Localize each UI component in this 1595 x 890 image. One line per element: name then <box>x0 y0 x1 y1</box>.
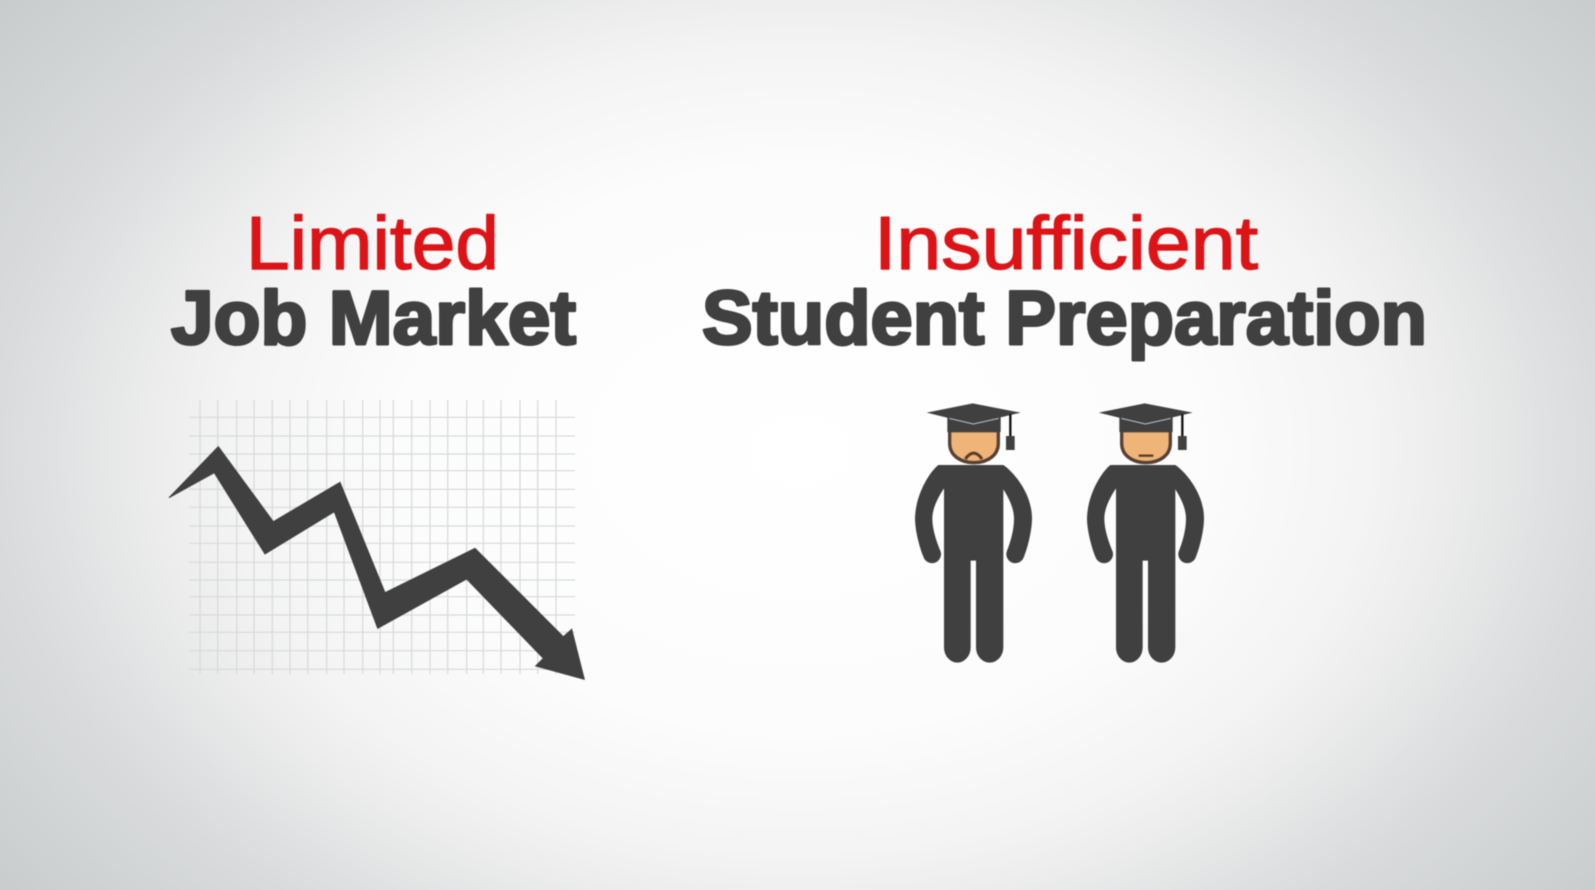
panel: insufficient student preparation <box>702 201 1427 663</box>
heading: Limited Job Market: Limited <box>246 201 499 285</box>
arms <box>1087 465 1204 563</box>
tassel <box>1179 414 1186 437</box>
body and legs <box>944 465 1003 663</box>
icon: neutral graduate <box>1087 403 1204 663</box>
cap <box>1119 417 1173 432</box>
arms <box>915 465 1032 563</box>
mouth: flat <box>1139 452 1153 459</box>
heading: Insufficient Student Preparation: Insufficient <box>874 201 1258 285</box>
mouth: frown <box>965 453 982 459</box>
panel: limited job market <box>169 201 584 679</box>
body and legs <box>1116 465 1175 663</box>
icon: frowning graduate <box>915 403 1032 663</box>
heading: Insufficient Student Preparation: Student Preparation <box>702 276 1427 361</box>
heading: Limited Job Market <box>171 201 576 361</box>
face <box>950 431 998 463</box>
cap <box>947 417 1001 432</box>
face <box>1122 431 1170 463</box>
arrow: downward trend <box>169 447 584 679</box>
heading: Limited Job Market: Job Market <box>171 276 576 361</box>
heading: Insufficient Student Preparation <box>702 201 1427 361</box>
tassel <box>1007 414 1014 437</box>
chart: falling trend on grid <box>169 400 584 679</box>
